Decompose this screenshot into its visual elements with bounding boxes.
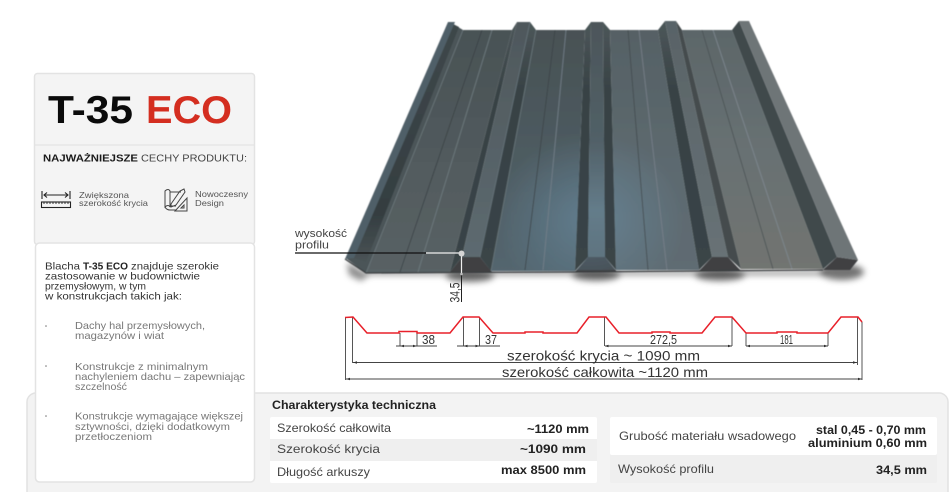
panel: technical specifications [27, 393, 948, 492]
front edge [345, 259, 823, 273]
dimension: 38: 38 [422, 333, 435, 347]
right edge rib [732, 21, 837, 269]
panel: product description [36, 243, 254, 482]
table: material and profile: aluminium 0,60 mm [808, 436, 927, 450]
table: dimensions: max 8500 mm [501, 463, 586, 477]
list item: stiffness [45, 410, 243, 443]
callout: profile height [294, 228, 464, 302]
heading: key features [43, 152, 247, 164]
table: material and profile: Wysokość profilu [618, 462, 714, 476]
dimension lines [346, 317, 862, 380]
undersides of ribs [450, 257, 858, 272]
feature text: wider coverage: Zwiększona [79, 190, 129, 200]
feature text: wider coverage [79, 190, 148, 208]
list item: minimal slope: szczelność [75, 381, 127, 393]
feature text: wider coverage: szerokość krycia [79, 198, 148, 208]
table: dimensions: ~1090 mm [520, 442, 586, 456]
text block: introduction: Blacha [45, 260, 80, 272]
table: material and profile [610, 417, 937, 483]
table: material and profile: stal 0,45 - 0,70 mm [816, 423, 926, 437]
table: material and profile: 34,5 mm [876, 463, 927, 477]
product image: trapezoidal roofing sheet [345, 21, 864, 282]
profile cross-section diagram [345, 317, 862, 380]
list item: minimal slope: Konstrukcje z minimalnym [75, 361, 208, 373]
feature text: modern design: Design [195, 198, 224, 208]
dimension: 272,5: 272,5 [650, 333, 677, 347]
title [48, 89, 232, 132]
coverage width label: szerokość krycia ~ 1090 mm [507, 348, 700, 364]
callout: profile height: profilu [295, 240, 329, 252]
icon: design drawing with pencil and set square [165, 189, 187, 211]
title: T-35 [48, 89, 133, 132]
text block: introduction: zastosowanie w budownictwie [45, 270, 200, 282]
list item: stiffness: sztywności, dzięki dodatkowym [75, 421, 230, 433]
callout: profile height: 34,5 [446, 282, 462, 302]
list item: minimal slope [45, 361, 245, 393]
rib 4 [658, 21, 712, 270]
title: ECO [146, 89, 232, 132]
red profile line [345, 317, 862, 333]
surface highlight [491, 100, 741, 271]
table: dimensions: Długość arkuszy [277, 465, 370, 479]
text block: introduction: przemysłowym, w tym [45, 280, 146, 292]
list item: halls [45, 320, 205, 342]
text block: introduction [44, 260, 219, 302]
rib 2 [450, 22, 517, 272]
stiffening grooves [366, 22, 792, 273]
rib 3 [575, 22, 591, 271]
flat valleys [366, 30, 512, 273]
callout: profile height: wysokość [294, 228, 348, 240]
total width label: szerokość całkowita ~1120 mm [502, 364, 708, 380]
text block: introduction: T-35 ECO [83, 260, 128, 272]
table: dimensions: Szerokość całkowita [277, 421, 391, 435]
feature text: modern design: Nowoczesny [195, 189, 249, 199]
table: dimensions [270, 417, 597, 483]
text block: introduction: w konstrukcjach takich jak: [44, 290, 182, 302]
list item: stiffness: Konstrukcje wymagające większej [75, 410, 243, 422]
table: dimensions: ~1120 mm [527, 422, 589, 436]
heading: key features: NAJWAŻNIEJSZE [43, 152, 138, 164]
icon: ruler with width arrow [42, 191, 70, 208]
list item: halls: Dachy hal przemysłowych, [75, 320, 205, 332]
dimension: 37: 37 [485, 333, 497, 347]
table: material and profile: Grubość materiału wsadowego [619, 429, 796, 443]
list item: stiffness: przetłoczeniom [75, 431, 152, 443]
dimension: 181: 181 [780, 333, 793, 347]
text block: introduction: znajduje szerokie [131, 260, 219, 272]
list item: halls: magazynów i wiat [75, 330, 164, 342]
feature text: modern design [195, 189, 249, 208]
heading: technical specifications: Charakterystyka techniczna [272, 400, 437, 412]
left edge rib [347, 24, 463, 273]
panel: product title and features [34, 74, 254, 244]
table: dimensions: Szerokość krycia [277, 442, 380, 456]
sheet shadow [347, 262, 864, 282]
heading: key features: CECHY PRODUKTU: [141, 152, 247, 164]
list item: minimal slope: nachyleniem dachu – zapewniając [75, 371, 245, 383]
dimension arrowheads [346, 345, 862, 380]
